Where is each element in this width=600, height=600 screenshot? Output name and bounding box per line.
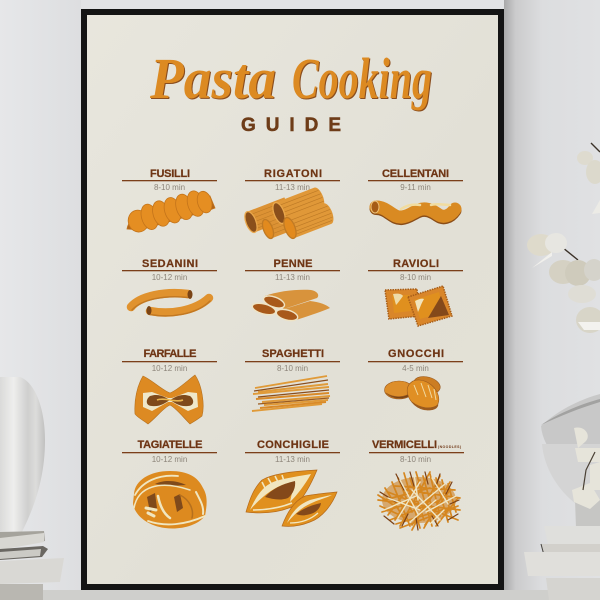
- item: cellentani: 9-11 min: [400, 183, 431, 192]
- title: [149, 46, 433, 112]
- item: spaghetti: SPAGHETTI: [262, 348, 324, 360]
- item: fusilli: [122, 168, 217, 235]
- item: farfalle: FARFALLE: [144, 348, 196, 360]
- icon: fusilli: [125, 187, 215, 235]
- icon: farfalle: [135, 375, 203, 424]
- item: farfalle: [122, 348, 217, 424]
- left decor: vase and books: [0, 377, 64, 600]
- item: ravioli: 8-10 min: [400, 273, 431, 282]
- icon: tagiatelle: [133, 471, 207, 528]
- item: sedanini: 10-12 min: [152, 273, 187, 282]
- icon: conchiglie: [246, 470, 337, 526]
- item: tagiatelle: 10-12 min: [152, 455, 187, 464]
- icon: penne: [251, 290, 330, 323]
- item: farfalle: 10-12 min: [152, 364, 187, 373]
- icon: gnocchi: [384, 374, 445, 416]
- item: vermicelli: 8-10 min: [400, 455, 431, 464]
- item: tagiatelle: [122, 439, 217, 528]
- icon: cellentani: [371, 201, 455, 219]
- icon: rigatoni: [242, 186, 336, 240]
- title: Pasta: [149, 46, 276, 111]
- icon: vermicelli: [378, 472, 460, 530]
- poster frame: [81, 9, 504, 590]
- item: cellentani: [368, 168, 463, 219]
- item: rigatoni: [242, 168, 340, 240]
- title: Pasta: [150, 47, 277, 112]
- item: ravioli: [368, 258, 463, 326]
- item: rigatoni: RIGATONI: [264, 168, 322, 180]
- item: sedanini: SEDANINI: [142, 258, 198, 270]
- right decor: plant, bowl and books: [524, 143, 600, 600]
- icon: spaghetti: [252, 376, 330, 411]
- item: tagiatelle: TAGIATELLE: [138, 439, 202, 451]
- item: penne: [245, 258, 340, 323]
- item: penne: 11-13 min: [275, 273, 310, 282]
- item: vermicelli: [369, 439, 464, 530]
- item: conchiglie: 11-13 min: [275, 455, 310, 464]
- item: conchiglie: [245, 439, 340, 526]
- item: gnocchi: [368, 348, 463, 416]
- item: gnocchi: GNOCCHI: [388, 348, 444, 360]
- item: vermicelli: VERMICELLI: [372, 439, 437, 451]
- item: vermicelli: (NOODLES): [438, 445, 461, 449]
- item: rigatoni: 11-13 min: [275, 183, 310, 192]
- item: fusilli: FUSILLI: [150, 168, 190, 180]
- item: sedanini: [122, 258, 217, 316]
- item: cellentani: CELLENTANI: [382, 168, 449, 180]
- item: gnocchi: 4-5 min: [402, 364, 429, 373]
- icon: ravioli: [385, 286, 452, 326]
- icon: sedanini: [131, 290, 210, 316]
- item: ravioli: RAVIOLI: [393, 258, 439, 270]
- item: conchiglie: CONCHIGLIE: [257, 439, 329, 451]
- item: penne: PENNE: [274, 258, 312, 270]
- title: Cooking: [293, 47, 433, 112]
- item: spaghetti: [245, 348, 340, 411]
- subtitle: GUIDE: [241, 115, 341, 136]
- title: Cooking: [292, 46, 432, 111]
- item: spaghetti: 8-10 min: [277, 364, 308, 373]
- item: fusilli: 8-10 min: [154, 183, 185, 192]
